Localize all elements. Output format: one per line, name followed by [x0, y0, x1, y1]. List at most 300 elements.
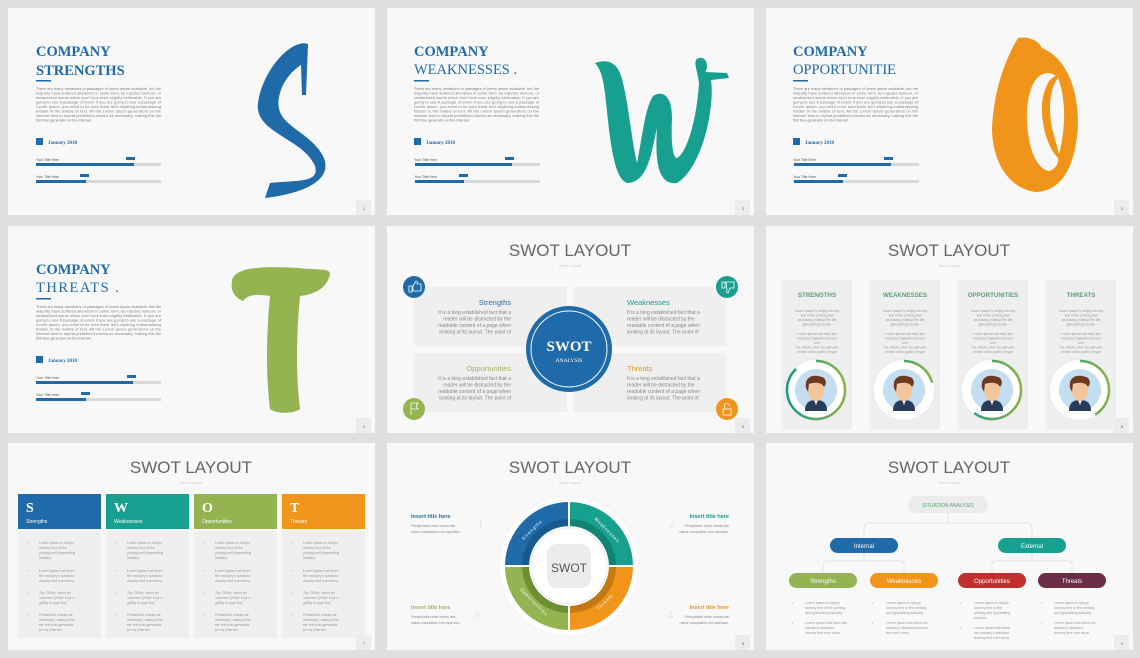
letter W	[595, 58, 729, 183]
bullet texts: dummy text ever since.	[974, 636, 1010, 640]
opportunities text	[438, 364, 512, 402]
column S: Lorem Ipsum has been	[39, 569, 75, 573]
column W: printing and typesetting	[127, 551, 163, 555]
column O: •	[203, 541, 205, 545]
item 3	[411, 605, 480, 625]
column: strengths: Lorem Ipsum has been the	[797, 332, 837, 336]
paragraph	[36, 305, 162, 340]
strengths text: It is a long established fact that a	[438, 310, 511, 316]
ring chart: Strengths	[521, 519, 543, 541]
column T: Threats	[290, 519, 307, 525]
column S: unknown printer took a	[39, 596, 74, 600]
column: threats: necessary, making this the	[1062, 318, 1101, 322]
title: SWOT LAYOUT	[509, 241, 631, 260]
paragraph: first true generator on the Internet.	[414, 118, 470, 122]
center circle	[526, 306, 612, 392]
column O: printing and typesetting	[215, 551, 251, 555]
opportunities text: Opportunities	[466, 364, 511, 373]
title: Swot Layout	[180, 480, 203, 485]
paragraph: majority have suffered alteration in some form, by injected humour, or	[414, 92, 540, 96]
bullet texts: industry's standard	[805, 626, 834, 630]
column: opportunities: necessary, making this the	[974, 318, 1013, 322]
icon: thumbs up	[403, 276, 425, 298]
column O: dummy text of the	[215, 546, 243, 550]
weaknesses text: looking at its layout. The point of	[627, 330, 699, 336]
column: threats: THREATS	[1067, 292, 1095, 299]
column T: the industry's standard	[303, 574, 338, 578]
slide 2: company weaknesses: 2	[742, 206, 745, 211]
column S: The 1500s, when an	[39, 591, 71, 595]
bullet texts: dummy text ever since.	[1054, 631, 1090, 635]
title	[793, 44, 896, 78]
item 4: natus voluptatem rem aperiam.	[679, 621, 729, 625]
progress bars: Your Title Here	[36, 376, 59, 380]
progress bars	[36, 157, 161, 183]
column T: •	[291, 569, 293, 573]
opportunities text: looking at its layout. The point of	[439, 396, 512, 402]
column S: Predefined chunks as	[39, 613, 73, 617]
column T: Lorem Ipsum is simply	[303, 541, 338, 545]
column: weaknesses: text	[902, 341, 908, 345]
slide 8: swot ring: 8	[742, 641, 745, 646]
column: strengths: Lorem Ipsum is simply dummy	[795, 309, 840, 313]
column: threats: Lorem Ipsum has been the	[1061, 332, 1101, 336]
column: opportunities: The 1500s, when an unknown	[971, 346, 1015, 350]
slide 9: situation analysis tree	[766, 443, 1133, 650]
bullet texts	[792, 601, 1096, 640]
column W: •	[115, 541, 117, 545]
title: THREATS .	[36, 280, 120, 296]
column W: Predefined chunks as	[127, 613, 161, 617]
slide 5: swot analysis circle	[387, 226, 754, 433]
column O	[194, 494, 277, 638]
column: opportunities	[958, 280, 1028, 430]
column T: •	[291, 541, 293, 545]
column: strengths: typesetting industry	[803, 322, 832, 326]
node: external: External	[1021, 544, 1043, 550]
title: Swot Layout	[559, 480, 582, 485]
strengths text	[438, 298, 512, 336]
bullet texts: industry's standard	[1054, 626, 1083, 630]
strengths text: looking at its layout. The point of	[439, 330, 512, 336]
icon: lock	[716, 398, 738, 420]
paragraph: majority have suffered alteration in some form, by injected humour, or	[793, 92, 919, 96]
column: strengths: text	[814, 341, 820, 345]
column W: the industry's standard	[127, 574, 162, 578]
title	[414, 44, 517, 78]
paragraph: randomised words which don't look even slightly believable. If you are	[793, 96, 918, 100]
title: SWOT LAYOUT	[888, 458, 1010, 477]
ring chart: SWOT	[551, 561, 588, 575]
bullet texts: dummy text of the printing	[886, 606, 926, 610]
column S: •	[27, 591, 29, 595]
column: strengths: necessary, making this the	[798, 318, 837, 322]
paragraph: Lorem Ipsum, you need to be sure there isn't anything embarrassing	[414, 105, 539, 109]
column T: industry.	[303, 556, 316, 560]
column: weaknesses	[870, 280, 940, 430]
column S: the industry's standard	[39, 574, 74, 578]
paragraph: going to use A passage of lorem if you are going to use a passage of	[36, 318, 162, 322]
item 3: Perspiciatis unde omnis iste	[411, 615, 456, 619]
column W: Weaknesses	[114, 519, 143, 525]
paragraph: going to use A passage of lorem if you are going to use a passage of	[414, 100, 540, 104]
bullet texts: •	[792, 621, 794, 625]
column: strengths: industry's standard dummy	[797, 336, 837, 340]
column T: galley of type and	[303, 601, 330, 605]
column O: industry.	[215, 556, 228, 560]
weaknesses text: readable content of a page when	[627, 323, 700, 329]
item 4: Insert title here	[690, 605, 729, 611]
column S: industry.	[39, 556, 52, 560]
title: OPPORTUNITIE	[793, 62, 896, 78]
progress bars	[414, 157, 540, 183]
column W: W	[114, 501, 128, 516]
slide 7: swot columns	[8, 443, 375, 650]
bullet texts: Lorem Ipsum has been the	[1054, 621, 1096, 625]
paragraph: Internet tend to repeat predefined chunks as necessary, making this the	[36, 332, 161, 336]
column T: dummy text ever since.	[303, 579, 339, 583]
bullet texts: dummy text ever since.	[805, 631, 841, 635]
ring chart: Opportunities	[519, 587, 549, 617]
column: strengths: The 1500s, when an unknown	[795, 346, 839, 350]
column W: unknown printer took a	[127, 596, 162, 600]
column: opportunities: printer took a galley of type	[973, 350, 1013, 354]
node: strengths: Strengths	[810, 579, 836, 585]
paragraph: randomised words which don't look even slightly believable. If you are	[36, 96, 161, 100]
node: opportunities: Opportunities	[974, 579, 1010, 585]
item 4: Perspiciatis unde omnis iste	[684, 615, 729, 619]
title: COMPANY	[414, 44, 489, 60]
bullet texts: •	[872, 621, 874, 625]
slide 1: company strengths: 1	[363, 206, 366, 211]
slide 9: situation analysis tree: 9	[1121, 641, 1124, 646]
column W	[106, 494, 189, 638]
column W: •	[115, 613, 117, 617]
column O: unknown printer took a	[215, 596, 250, 600]
title: COMPANY	[36, 262, 111, 278]
column W: The 1500s, when an	[127, 591, 159, 595]
slide 7: swot columns: 7	[363, 641, 366, 646]
date	[793, 138, 835, 146]
paragraph: Lorem Ipsum, you need to be sure there isn't anything embarrassing	[36, 105, 161, 109]
paragraph: majority have suffered alteration in some form, by injected humour, or	[36, 310, 162, 314]
column: threats: text of the printing and	[1065, 314, 1097, 318]
center circle: ANALYSIS	[556, 358, 582, 364]
threats text: It is a long established fact that a	[627, 376, 700, 382]
bullet texts: dummy text of the	[974, 606, 1002, 610]
bullet texts: Lorem Ipsum has been the	[805, 621, 847, 625]
paragraph: Internet tend to repeat predefined chunks as necessary, making this the	[793, 114, 918, 118]
paragraph: Internet tend to repeat predefined chunks as necessary, making this the	[414, 114, 539, 118]
node: threats	[1038, 573, 1106, 588]
title: Swot Layout	[938, 480, 961, 485]
title: SWOT LAYOUT	[509, 458, 631, 477]
column O: O	[202, 501, 213, 516]
bullet texts: and typesetting industry.	[805, 611, 843, 615]
item 2	[669, 514, 729, 534]
column S: Lorem Ipsum is simply	[39, 541, 74, 545]
column W: necessary, making this	[127, 618, 163, 622]
bullet texts: •	[1041, 621, 1043, 625]
bullet texts: Lorem Ipsum has been the	[886, 621, 928, 625]
progress bars	[36, 375, 161, 401]
item 3: natus voluptatem rem aperiam.	[411, 621, 461, 625]
date	[36, 356, 78, 364]
date: January 2018	[48, 141, 78, 146]
column: opportunities: text of the printing and	[977, 314, 1009, 318]
column O: galley of type and	[215, 601, 242, 605]
weaknesses text: It is a long established fact that a	[627, 310, 700, 316]
paragraph	[36, 87, 162, 122]
column T: T	[290, 501, 300, 516]
threats text: readable content of a page when	[627, 389, 700, 395]
column: opportunities: OPPORTUNITIES	[968, 292, 1018, 299]
column S	[18, 494, 101, 638]
date	[414, 138, 456, 146]
bullet texts: •	[960, 626, 962, 630]
letter S	[258, 43, 326, 198]
column S: S	[26, 501, 34, 516]
node: weaknesses	[870, 573, 938, 588]
column S: on the Internet.	[39, 628, 63, 632]
bullet texts: •	[792, 601, 794, 605]
bullet texts: Lorem Ipsum is simply	[1054, 601, 1089, 605]
date: January 2018	[426, 141, 456, 146]
column O: The 1500s, when an	[215, 591, 247, 595]
node: internal	[830, 538, 898, 553]
slide 4: company threats: 4	[363, 424, 366, 429]
column: opportunities: typesetting industry	[979, 322, 1008, 326]
threats text: looking at its layout. The point of	[627, 396, 699, 402]
column: opportunities: industry's standard dummy	[973, 336, 1013, 340]
node: strengths	[789, 573, 857, 588]
paragraph: Lorem Ipsum, you need to be sure there isn't anything embarrassing	[36, 323, 161, 327]
paragraph: hidden in the middle of text. All the Lorem Ipsum generators on the	[36, 110, 161, 114]
column O: Predefined chunks as	[215, 613, 249, 617]
bullet texts: Lorem Ipsum is simply	[886, 601, 921, 605]
column S: printing and typesetting	[39, 551, 75, 555]
bullet texts: printing and typesetting	[974, 611, 1010, 615]
column T: necessary, making this	[303, 618, 339, 622]
paragraph: randomised words which don't look even slightly believable. If you are	[414, 96, 539, 100]
column O: •	[203, 591, 205, 595]
column W: dummy text of the	[127, 546, 155, 550]
column: opportunities: Lorem Ipsum is simply dummy	[971, 309, 1016, 313]
column: weaknesses: The 1500s, when an unknown	[883, 346, 927, 350]
paragraph	[414, 87, 540, 122]
column S: •	[27, 541, 29, 545]
opportunities text: reader will be distracted by the	[443, 382, 511, 388]
threats text	[627, 364, 700, 402]
column: threats: The 1500s, when an unknown	[1059, 346, 1103, 350]
paragraph	[793, 87, 919, 122]
progress bars: Your Title Here	[414, 158, 437, 162]
item 3: 3	[473, 607, 480, 622]
paragraph: There are many variations of passages of lorem ipsum available, but the	[793, 87, 918, 91]
paragraph: Lorem Ipsum, you need to be sure there isn't anything embarrassing	[793, 105, 918, 109]
column O: Lorem Ipsum has been	[215, 569, 251, 573]
progress bars: Your Title Here	[793, 175, 816, 179]
bullet texts: and typesetting industry.	[886, 611, 924, 615]
progress bars: Your Title Here	[36, 158, 59, 162]
column: weaknesses: printer took a galley of type	[885, 350, 925, 354]
item 2: Insert title here	[690, 514, 729, 520]
title	[36, 44, 125, 79]
column: threats: Lorem Ipsum is simply dummy	[1059, 309, 1104, 313]
bullet texts: Lorem Ipsum is simply	[974, 601, 1009, 605]
item 2: natus voluptatem rem aperiam.	[679, 530, 729, 534]
slide 4: company threats	[8, 226, 375, 433]
node: situation analysis: SITUATION ANALYSIS	[922, 503, 974, 509]
node: external	[998, 538, 1066, 553]
slide 1: company strengths	[8, 8, 375, 215]
column: weaknesses: Lorem Ipsum has been the	[885, 332, 925, 336]
column S: necessary, making this	[39, 618, 75, 622]
paragraph: Internet tend to repeat predefined chunks as necessary, making this the	[36, 114, 161, 118]
item 1	[411, 514, 484, 534]
column S: dummy text of the	[39, 546, 67, 550]
paragraph: going to use A passage of lorem if you are going to use a passage of	[36, 100, 162, 104]
center circle: SWOT	[546, 339, 592, 355]
bullet texts: industry's standard dummy	[886, 626, 928, 630]
paragraph: going to use A passage of lorem if you are going to use a passage of	[793, 100, 919, 104]
column T: •	[291, 613, 293, 617]
slide 6: swot avatars: 6	[1121, 424, 1124, 429]
threats text: reader will be distracted by the	[627, 382, 695, 388]
column: weaknesses: text of the printing and	[889, 314, 921, 318]
paragraph: There are many variations of passages of lorem ipsum available, but the	[414, 87, 539, 91]
column T: unknown printer took a	[303, 596, 338, 600]
column: strengths: printer took a galley of type	[797, 350, 837, 354]
node: threats: Threats	[1062, 579, 1082, 585]
bullet texts: •	[1041, 601, 1043, 605]
column T: •	[291, 591, 293, 595]
paragraph: randomised words which don't look even slightly believable. If you are	[36, 314, 161, 318]
column T: printing and typesetting	[303, 551, 339, 555]
column: threats: industry's standard dummy	[1061, 336, 1101, 340]
progress bars: Your Title Here	[36, 175, 59, 179]
paragraph: hidden in the middle of text. All the Lorem Ipsum generators on the	[414, 110, 539, 114]
slide 2: company weaknesses	[387, 8, 754, 215]
strengths text: readable content of a page when	[438, 323, 511, 329]
paragraph: hidden in the middle of text. All the Lorem Ipsum generators on the	[793, 110, 918, 114]
column W: dummy text ever since.	[127, 579, 163, 583]
column: weaknesses: necessary, making this the	[886, 318, 925, 322]
letter T	[232, 267, 330, 413]
bullet texts: Lorem Ipsum has been	[974, 626, 1010, 630]
paragraph: majority have suffered alteration in some form, by injected humour, or	[36, 92, 162, 96]
column: strengths	[782, 280, 852, 430]
progress bars: Your Title Here	[36, 393, 59, 397]
weaknesses text: reader will be distracted by the	[627, 316, 695, 322]
column O: necessary, making this	[215, 618, 251, 622]
column W: Lorem Ipsum has been	[127, 569, 163, 573]
item 2: Perspiciatis unde omnis iste	[684, 524, 729, 528]
column O: •	[203, 613, 205, 617]
slide 3: company opportunities	[766, 8, 1133, 215]
ring chart: Threats	[596, 593, 614, 611]
opportunities text: It is a long established fact that a	[438, 376, 511, 382]
threats text: Threats	[627, 364, 653, 373]
column: weaknesses: WEAKNESSES	[883, 292, 927, 299]
strengths text: Strengths	[479, 298, 511, 307]
column W: on the Internet.	[127, 628, 151, 632]
strengths text: reader will be distracted by the	[443, 316, 511, 322]
icon: flag	[403, 398, 425, 420]
weaknesses text	[627, 298, 700, 336]
item 2: 2	[669, 515, 676, 530]
column: threats	[1046, 280, 1116, 430]
column O: Lorem Ipsum is simply	[215, 541, 250, 545]
column: opportunities: Lorem Ipsum has been the	[973, 332, 1013, 336]
title: STRENGTHS	[36, 63, 125, 79]
node: weaknesses: Weaknesses	[887, 579, 921, 585]
bullet texts: dummy text of the printing	[1054, 606, 1094, 610]
item 4: 4	[667, 607, 674, 622]
item 3: Insert title here	[411, 605, 450, 611]
column W: the first true generator	[127, 623, 162, 627]
column: opportunities: text	[990, 341, 996, 345]
opportunities text: readable content of a page when	[438, 389, 511, 395]
column S: Strengths	[26, 519, 48, 525]
bullet texts: the industry's standard	[974, 631, 1009, 635]
title: WEAKNESSES .	[414, 62, 517, 78]
column O: on the Internet.	[215, 628, 239, 632]
title: Swot Layout	[938, 263, 961, 268]
slide 6: swot avatars	[766, 226, 1133, 433]
column O: the industry's standard	[215, 574, 250, 578]
bullet texts: •	[872, 601, 874, 605]
column S: galley of type and	[39, 601, 66, 605]
letter O	[992, 37, 1078, 192]
column O: dummy text ever since.	[215, 579, 251, 583]
ring chart	[499, 496, 639, 636]
paragraph: first true generator on the Internet.	[793, 118, 849, 122]
column T: dummy text of the	[303, 546, 331, 550]
column T	[282, 494, 365, 638]
ring chart: Weaknesses	[593, 516, 621, 544]
paragraph: There are many variations of passages of lorem ipsum available, but the	[36, 87, 161, 91]
column: threats: typesetting industry	[1067, 322, 1096, 326]
column T: Predefined chunks as	[303, 613, 337, 617]
bullet texts: •	[960, 601, 962, 605]
title: Swot Layout	[559, 263, 582, 268]
bullet texts: text ever since.	[886, 631, 910, 635]
title	[36, 262, 120, 296]
item 1: Perspiciatis unde omnis iste	[411, 524, 456, 528]
column S: dummy text ever since.	[39, 579, 75, 583]
bullet texts: and typesetting industry.	[1054, 611, 1092, 615]
paragraph: first true generator on the Internet.	[36, 336, 92, 340]
column S: •	[27, 569, 29, 573]
node: internal: Internal	[854, 544, 874, 550]
column W: Lorem Ipsum is simply	[127, 541, 162, 545]
node: opportunities	[958, 573, 1026, 588]
column: weaknesses: typesetting industry	[891, 322, 920, 326]
column W: galley of type and	[127, 601, 154, 605]
item 1: 1	[477, 515, 484, 530]
slide 3: company opportunities: 3	[1121, 206, 1124, 211]
icon: thumbs down	[716, 276, 738, 298]
column O: •	[203, 569, 205, 573]
title: SWOT LAYOUT	[130, 458, 252, 477]
item 4	[667, 605, 729, 625]
column: threats: printer took a galley of type	[1061, 350, 1101, 354]
column: weaknesses: industry's standard dummy	[885, 336, 925, 340]
connectors	[823, 513, 1072, 573]
quadrant panels	[414, 287, 726, 412]
paragraph: hidden in the middle of text. All the Lorem Ipsum generators on the	[36, 328, 161, 332]
